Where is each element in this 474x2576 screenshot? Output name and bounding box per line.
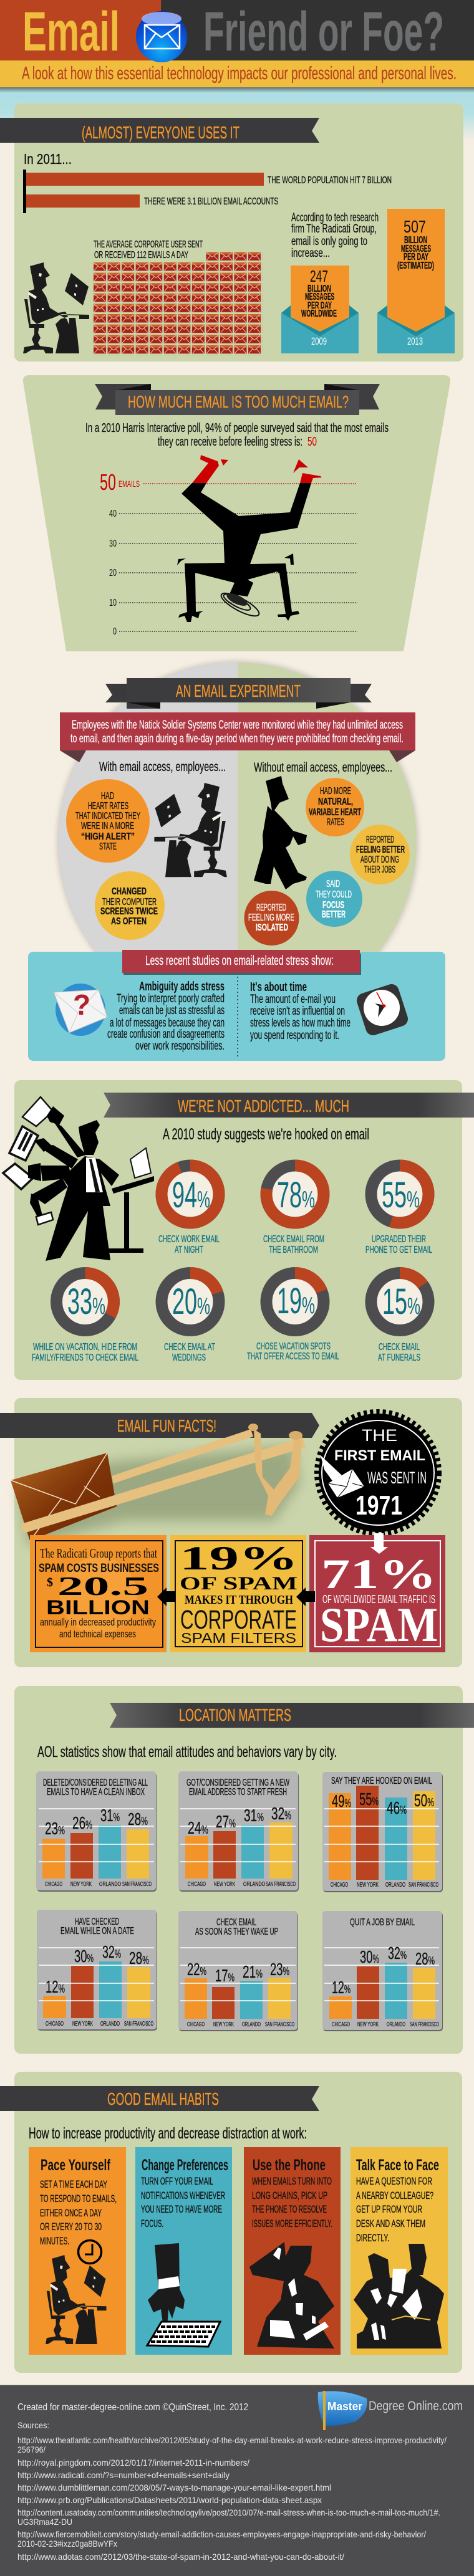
donut 33: WHILE ON VACATION, HIDE FROM [33, 1342, 137, 1353]
text: about time: receive isn't as influential on [250, 1005, 345, 1018]
sources: http://www.dumblittleman.com/2008/05/7-ways-to-manage-your-email-like-expert.html [17, 2483, 331, 2492]
icon: man at computer mirrored [154, 783, 227, 877]
bubble: changed screens: SCREENS TWICE [100, 906, 158, 917]
icon: clock ring [79, 2240, 101, 2264]
chart card: quit a job: QUIT A JOB BY EMAIL [350, 1917, 415, 1928]
card: change preferences: TURN OFF YOUR EMAIL [141, 2175, 213, 2187]
donut 94: AT NIGHT [175, 1245, 203, 1255]
chart: email scale: 40 [109, 509, 117, 519]
bar chart: population vs accounts: THE WORLD POPULATION HIT 7 BILLION [268, 175, 392, 186]
chart card: wake up: ORLANDO [242, 2021, 261, 2028]
donut 15 [371, 1273, 428, 1363]
chart: email scale: 30 [109, 539, 117, 549]
box: spam costs: 20.5 [57, 1573, 148, 1601]
chart card: wake up: 22% [187, 1960, 206, 1979]
ribbon heading: (ALMOST) EVERYONE USES IT [82, 123, 239, 142]
card: change preferences: FOCUS. [141, 2218, 163, 2229]
arrow: black left one [157, 1587, 175, 1606]
bubble: natural heart rates: RATES [327, 817, 344, 828]
bubble: feeling better: REPORTED [366, 835, 394, 845]
chart card: quit a job [322, 1911, 443, 2031]
bubble: feeling better: FEELING BETTER [356, 845, 405, 855]
panel: good habits [0, 2072, 462, 2373]
chart card: quit a job: CHICAGO [332, 2021, 350, 2028]
ribbon heading [110, 1703, 474, 1728]
chart card: date: EMAIL WHILE ON A DATE [60, 1926, 134, 1937]
chart card: new address: ORLANDO [243, 1881, 265, 1888]
without email heading: Without email access, employees... [254, 760, 392, 775]
envelope 2013 [377, 209, 455, 353]
sources: http://www.fiercemobileit.com/story/study-email-addiction-causes-employees-engage-inappropriate-and-risky-behavior/ [17, 2529, 426, 2539]
bubble: heart rates [66, 779, 150, 863]
chart card: hooked: NEW YORK [357, 1882, 379, 1889]
average user text [94, 239, 203, 261]
text: ambiguity [107, 980, 225, 1053]
donut 15: 15% [382, 1281, 420, 1322]
envelope 2009: 247 [310, 267, 328, 285]
box: spam costs [30, 1535, 167, 1652]
chart card: date: HAVE CHECKED [75, 1917, 119, 1927]
with email heading: With email access, employees... [99, 760, 226, 774]
icon: clock [355, 982, 410, 1037]
chart card: quit a job: NEW YORK [357, 2021, 379, 2028]
envelope 2009: PER DAY [307, 300, 332, 311]
badge: first email: THE [362, 1426, 397, 1445]
chart card: date: CHICAGO [46, 2021, 64, 2028]
chart card: hooked: ORLANDO [385, 1882, 405, 1889]
box: spam costs: and technical expenses [59, 1628, 136, 1640]
ribbon heading: GOOD EMAIL HABITS [107, 2089, 219, 2109]
donut 15: CHECK EMAIL [379, 1342, 420, 1353]
chart card: date [37, 1910, 157, 2031]
donut 20: WEDDINGS [172, 1353, 206, 1363]
donut 94: 94% [172, 1175, 210, 1215]
average user text: THE AVERAGE CORPORATE USER SENT [94, 239, 203, 250]
donut 20: CHECK EMAIL AT [164, 1342, 215, 1353]
divider [237, 977, 238, 1056]
radicati text: firm The Radicati Group, [291, 223, 377, 236]
donut 15: AT FUNERALS [378, 1353, 420, 1363]
chart card: clean inbox: ORLANDO [99, 1881, 121, 1888]
donut 20 [162, 1273, 219, 1363]
chart card: new address: GOT/CONSIDERED GETTING A NEW [186, 1778, 290, 1788]
bubble: heart rates: WERE IN A MORE [81, 821, 134, 831]
bubble: heart rates: “HIGH ALERT” [81, 831, 135, 842]
text: about time [250, 980, 351, 1042]
chart card: hooked: 46% [387, 1798, 407, 1817]
card: change preferences: YOU NEED TO HAVE MORE [141, 2203, 222, 2215]
chart card: wake up: SAN FRANCISCO [265, 2021, 294, 2028]
card: use the phone: WHEN EMAILS TURN INTO [252, 2175, 332, 2187]
chart card: clean inbox: 28% [128, 1809, 148, 1829]
donut 94 [158, 1166, 220, 1255]
logo [318, 2391, 463, 2430]
header [0, 0, 474, 93]
sources: http://royal.pingdom.com/2012/01/17/internet-2011-in-numbers/ [17, 2458, 249, 2468]
chart card: new address: EMAIL ADDRESS TO START FRESH [189, 1787, 287, 1798]
bubble: heart rates: STATE [99, 841, 117, 852]
envelope icon grid: 112 emails [94, 252, 263, 355]
chart card: date: 32% [102, 1942, 121, 1961]
sources: http://www.adotas.com/2012/03/the-state-of-spam-in-2012-and-what-you-can-do-about-it/ [17, 2552, 344, 2562]
bubble: focus better [306, 871, 362, 927]
arrow: black left two [296, 1587, 315, 1606]
panel: location matters [14, 1686, 474, 2054]
chart: email scale: EMAILS [119, 479, 140, 489]
chart card: hooked: SAN FRANCISCO [409, 1882, 438, 1889]
sources: Sources: [17, 2420, 49, 2430]
donut 78: THE BATHROOM [269, 1245, 318, 1255]
panel: everyone uses it [0, 103, 463, 362]
chart card: date: ORLANDO [100, 2021, 120, 2028]
box: 71 percent: SPAM [320, 1597, 438, 1652]
chart card: new address: NEW YORK [214, 1881, 235, 1888]
chart card: quit a job: ORLANDO [387, 2021, 405, 2028]
poll text: they can receive before feeling stress is: [158, 435, 302, 449]
bar chart: population vs accounts [23, 170, 392, 213]
bubble: changed screens [95, 871, 165, 940]
ribbon heading: HOW MUCH EMAIL IS TOO MUCH EMAIL? [128, 392, 349, 411]
subheading: A 2010 study suggests we're hooked on email [163, 1126, 369, 1143]
donut 55 [365, 1166, 432, 1255]
chart card: hooked [322, 1772, 443, 1892]
icon: multitasking man [3, 1097, 154, 1261]
badge: first email [317, 1412, 439, 1534]
donut 33 [32, 1273, 138, 1363]
chart card: hooked: 55% [359, 1789, 379, 1809]
red heading banner [122, 950, 361, 975]
card: change preferences: NOTIFICATIONS WHENEVER [141, 2190, 225, 2201]
donut 55: UPGRADED THEIR [372, 1234, 426, 1245]
logo: Master [327, 2400, 362, 2413]
bubble: heart rates: THAT INDICATED THEY [75, 811, 140, 821]
card: pace yourself: Pace Yourself [41, 2157, 110, 2174]
text: ambiguity: a lot of messages because they can [110, 1017, 225, 1030]
card: pace yourself: TO RESPOND TO EMAILS, [40, 2193, 117, 2205]
chart card: quit a job: 12% [332, 1978, 351, 1997]
chart: email scale: 20 [109, 568, 117, 578]
chart card: clean inbox [36, 1771, 157, 1892]
envelope 2009: 2009 [311, 335, 327, 347]
box: spam costs: annually in decreased productivity [40, 1616, 156, 1628]
bubble: natural heart rates: HAD MORE [320, 786, 351, 797]
donut 20: 20% [172, 1281, 210, 1322]
icon: hand on keyboard [147, 2243, 220, 2347]
box: 19 percent: MAKES IT THROUGH [185, 1593, 293, 1607]
chart card: new address: 32% [271, 1804, 291, 1823]
icon: walking man [254, 776, 307, 889]
bubble: focus better: SAID [326, 879, 340, 889]
envelope 2013: PER DAY [404, 252, 428, 262]
chart card: date: 28% [129, 1948, 149, 1968]
envelope 2009 [281, 266, 359, 353]
panel: how much email [23, 375, 450, 651]
card: pace yourself: MINUTES. [40, 2235, 69, 2247]
chart card: wake up: 17% [215, 1966, 235, 1985]
red intro banner [60, 712, 415, 762]
card: change preferences: Change Preferences [142, 2157, 228, 2174]
donut 94: CHECK WORK EMAIL [158, 1234, 220, 1245]
bubble: natural heart rates [306, 778, 364, 836]
bubble: heart rates: HAD [101, 791, 114, 802]
radicati text: According to tech research [291, 211, 379, 224]
box: spam costs: $ [47, 1576, 53, 1589]
subheading: How to increase productivity and decrease distraction at work: [29, 2125, 307, 2142]
sources: UG3Rma4Z-DU [17, 2517, 72, 2527]
sources: 256796/ [17, 2444, 46, 2454]
blue top pattern [0, 87, 474, 140]
chart card: clean inbox: EMAILS TO HAVE A CLEAN INBOX [47, 1787, 145, 1798]
arrow: white down [370, 1533, 388, 1554]
text: ambiguity: Ambiguity adds stress [139, 980, 225, 994]
ribbon heading: AN EMAIL EXPERIMENT [176, 681, 301, 701]
chart card: clean inbox: 26% [72, 1813, 92, 1832]
donut 33: FAMILY/FRIENDS TO CHECK EMAIL [32, 1353, 138, 1363]
chart card: wake up: AS SOON AS THEY WAKE UP [195, 1927, 278, 1937]
bar chart: population vs accounts: THERE WERE 3.1 BILLION EMAIL ACCOUNTS [144, 196, 278, 207]
box: 71 percent: 71% [321, 1550, 437, 1597]
badge: first email: WAS SENT IN [367, 1468, 427, 1487]
chart card: clean inbox: DELETED/CONSIDERED DELETING ALL [43, 1778, 148, 1788]
icon: email globe [136, 11, 187, 62]
donut 19: THAT OFFER ACCESS TO EMAIL [247, 1351, 339, 1362]
badge: first email: FIRST EMAIL [334, 1447, 425, 1464]
bubble: focus better: THEY COULD [316, 889, 352, 900]
poll text: 50 [307, 435, 317, 449]
radicati text: email is only going to [291, 235, 367, 248]
chart card: hooked: CHICAGO [331, 1882, 348, 1889]
ribbon heading [95, 384, 380, 415]
donut 78: CHECK EMAIL FROM [263, 1234, 324, 1245]
icon: man at computer [23, 262, 89, 353]
text: ambiguity: Trying to interpret poorly crafted [117, 992, 225, 1005]
panel: not addicted [3, 1080, 474, 1380]
chart card: clean inbox: 23% [45, 1819, 65, 1838]
credit: Created for master-degree-online.com ©QuinStreet, Inc. 2012 [17, 2402, 248, 2413]
box: spam costs: The Radicati Group reports that [40, 1546, 157, 1561]
ribbon heading [105, 678, 372, 709]
icon: two people at desk [354, 2244, 444, 2349]
chart card: date: 12% [46, 1977, 65, 1996]
bubble: isolated: FEELING MORE [248, 912, 294, 923]
bubble: changed screens: CHANGED [112, 886, 147, 897]
envelope 2013: 2013 [407, 335, 423, 347]
box: 19 percent: OF SPAM [180, 1573, 297, 1594]
ribbon heading: WE'RE NOT ADDICTED... MUCH [178, 1096, 349, 1116]
sources [17, 2420, 447, 2562]
bubble: natural heart rates: VARIABLE HEART [309, 807, 361, 818]
chart card: quit a job: 28% [415, 1949, 435, 1968]
bubble: feeling better: THEIR JOBS [364, 864, 395, 875]
envelope 2013: MESSAGES [401, 244, 431, 254]
donut 19: CHOSE VACATION SPOTS [256, 1341, 331, 1352]
envelope 2013: BILLION [404, 235, 427, 246]
chart card: date: SAN FRANCISCO [124, 2021, 153, 2028]
card: use the phone: LONG CHAINS, PICK UP [252, 2190, 327, 2201]
envelope 2009: WORLDWIDE [301, 309, 337, 319]
panel: less recent studies [28, 950, 445, 1061]
chart card: wake up: 21% [243, 1962, 263, 1981]
text: ambiguity: emails can be just as stressful as [119, 1004, 225, 1017]
text: ambiguity: over work responsibilities. [135, 1040, 225, 1053]
envelope 2013: (ESTIMATED) [397, 261, 434, 271]
bubble: isolated [244, 891, 299, 946]
egg background [57, 661, 418, 1022]
chart: email scale: 10 [109, 598, 117, 608]
chart card: new address: 27% [216, 1812, 236, 1831]
ribbon heading [0, 1413, 319, 1438]
box: 71 percent [309, 1535, 445, 1652]
envelope 2013: 507 [404, 217, 426, 236]
chart card: quit a job: SAN FRANCISCO [410, 2021, 439, 2028]
icon: confused envelope [54, 984, 107, 1036]
sources: http://www.prb.org/Publications/Datasheets/2011/world-population-data-sheet.aspx [17, 2495, 322, 2505]
bubble: natural heart rates: NATURAL, [318, 797, 353, 807]
card: pace yourself: EITHER ONCE A DAY [40, 2207, 102, 2219]
chart card: date: 30% [74, 1946, 94, 1966]
average user text: OR RECEIVED 112 EMAILS A DAY [94, 250, 188, 261]
card: talk face to face: GET UP FROM YOUR [356, 2203, 422, 2215]
chart card: clean inbox: 31% [100, 1806, 120, 1825]
icon: confused envelope: ? [73, 989, 90, 1021]
card: talk face to face [351, 2147, 448, 2355]
text: about time: stress levels as how much time [250, 1017, 351, 1030]
text: about time: It's about time [250, 980, 307, 994]
chart card: hooked: 49% [332, 1791, 351, 1811]
donut 55: PHONE TO GET EMAIL [365, 1245, 432, 1255]
chart: email scale: 50 [100, 469, 116, 495]
card: pace yourself [29, 2147, 126, 2355]
chart card: new address: CHICAGO [188, 1881, 206, 1888]
box: spam costs: BILLION [46, 1596, 150, 1619]
bubble: isolated: ISOLATED [256, 922, 288, 933]
text: about time: The amount of e-mail you [250, 993, 336, 1006]
ribbon heading: LOCATION MATTERS [179, 1705, 291, 1725]
card: use the phone [244, 2147, 341, 2355]
sources: 2010-02-23#ixzz0ga8BwYFx [17, 2539, 117, 2549]
bubble: changed screens: AS OFTEN [111, 916, 147, 927]
red heading banner: Less recent studies on email-related stress show: [145, 954, 334, 968]
chart card: new address: 24% [188, 1818, 208, 1837]
bubble: changed screens: THEIR COMPUTER [102, 897, 157, 907]
chart card: wake up: CHECK EMAIL [216, 1917, 256, 1928]
bubble: heart rates: HEART RATES [88, 801, 128, 812]
chart card: wake up: CHICAGO [187, 2021, 205, 2028]
icon: slingshot with envelope [11, 1424, 306, 1546]
bubble: focus better: FOCUS [322, 900, 344, 911]
icon: man headstand in ground [177, 455, 322, 622]
card: talk face to face: DIRECTLY. [356, 2232, 389, 2244]
bubble: focus better: BETTER [322, 909, 346, 920]
chart card: hooked: 50% [414, 1791, 434, 1810]
box: 19 percent: CORPORATE [180, 1605, 297, 1635]
chart card: clean inbox: CHICAGO [45, 1881, 62, 1888]
bubble: feeling better [350, 825, 410, 884]
footer [0, 2385, 474, 2576]
chart card: wake up: NEW YORK [213, 2021, 234, 2028]
bubble: isolated: REPORTED [256, 903, 286, 913]
panel: fun facts [0, 1398, 462, 1667]
card: use the phone: THE PHONE TO RESOLVE [252, 2203, 327, 2215]
chart card: quit a job: 32% [388, 1943, 407, 1963]
card: use the phone: ISSUES MORE EFFICIENTLY. [252, 2218, 332, 2229]
chart card: wake up [178, 1911, 298, 2031]
ribbon heading [104, 1093, 474, 1118]
bubble: feeling better: ABOUT DOING [360, 855, 399, 865]
radicati text [291, 211, 379, 260]
text: about time: you spend responding to it. [250, 1029, 339, 1042]
chart card: wake up: 23% [270, 1960, 289, 1979]
chart card: clean inbox: SAN FRANCISCO [122, 1881, 152, 1888]
ribbon heading: EMAIL FUN FACTS! [117, 1416, 216, 1435]
ribbon heading [0, 118, 319, 143]
donut 78: 78% [277, 1175, 315, 1215]
chart card: new address: SAN FRANCISCO [266, 1881, 296, 1888]
card: talk face to face: HAVE A QUESTION FOR [356, 2175, 432, 2187]
text: ambiguity: create confusion and disagreements [107, 1028, 225, 1041]
box: 19 percent: 19% [180, 1539, 298, 1577]
in 2011: In 2011... [24, 151, 72, 167]
donut 33: 33% [67, 1281, 105, 1322]
donut 55: 55% [382, 1175, 420, 1215]
chart: email scale [100, 469, 357, 637]
title: Email [22, 0, 120, 62]
icon: man at desk [46, 2255, 107, 2344]
chart card: clean inbox: NEW YORK [70, 1881, 92, 1888]
chart card: quit a job: 30% [360, 1947, 379, 1966]
icon: man on phone [249, 2242, 334, 2349]
box: 19 percent: SPAM FILTERS [181, 1630, 296, 1646]
ribbon heading [0, 2086, 319, 2111]
card: pace yourself: SET A TIME EACH DAY [40, 2178, 107, 2190]
box: spam costs: SPAM COSTS BUSINESSES [39, 1562, 159, 1575]
envelope 2009: MESSAGES [305, 292, 334, 302]
donut 78 [263, 1166, 324, 1255]
chart card: new address [178, 1771, 299, 1892]
donut 19: 19% [277, 1281, 315, 1321]
donut 19 [247, 1273, 339, 1362]
badge: first email: 1971 [356, 1490, 402, 1521]
card: use the phone: Use the Phone [253, 2157, 326, 2174]
card: talk face to face: DESK AND ASK THEM [356, 2218, 425, 2229]
chart: email scale: 0 [113, 626, 117, 637]
chart card: new address: 31% [244, 1806, 264, 1825]
card: pace yourself: OR EVERY 20 TO 30 [40, 2221, 102, 2233]
panel: email experiment [57, 661, 418, 1022]
envelope 2009: BILLION [307, 284, 331, 294]
radicati text: increase... [291, 247, 330, 260]
card: change preferences [135, 2147, 232, 2355]
sources: http://www.radicati.com/?s=number+of+emails+sent+daily [17, 2470, 230, 2480]
box: 19 percent [170, 1535, 306, 1652]
poll text [85, 421, 389, 449]
chart card: date: NEW YORK [72, 2021, 93, 2028]
